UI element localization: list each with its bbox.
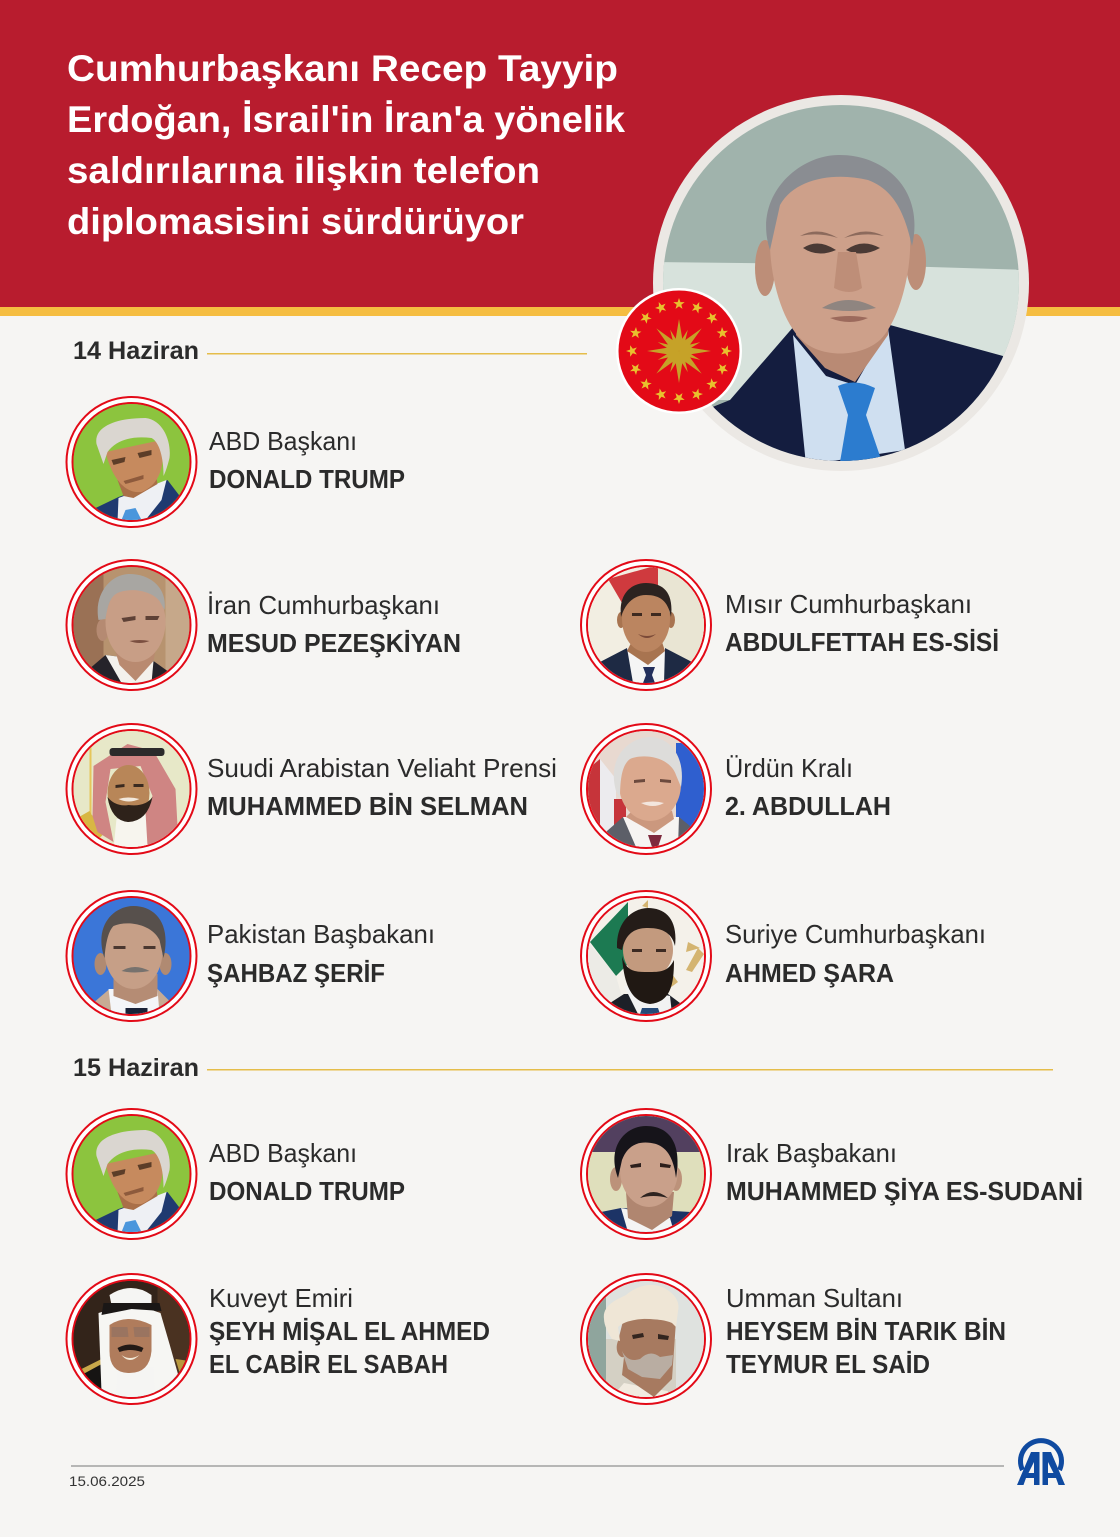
name: DONALD TRUMP: [209, 1176, 405, 1206]
entry: Muhammed Şiya es-Sudani: [581, 1109, 1083, 1239]
role: Suudi Arabistan Veliaht Prensi: [207, 753, 557, 783]
name: [726, 1316, 1006, 1379]
entry: Muhammed bin Selman: [66, 724, 557, 854]
portrait: Kral Abdullah: [581, 724, 711, 854]
section heading: 14 Haziran: 14 Haziran: [73, 337, 199, 365]
name: HEYSEM BİN TARIK BİN: [726, 1316, 1006, 1346]
portrait: Recep Tayyip Erdoğan: [650, 95, 1040, 471]
portrait: Şara: [581, 891, 711, 1021]
entry: Abdulfettah es-Sisi: [581, 560, 999, 690]
role: Umman Sultanı: [726, 1283, 903, 1313]
entry: Donald Trump (14 Haziran): [66, 397, 405, 527]
role: Ürdün Kralı: [725, 753, 853, 783]
name: [209, 1316, 490, 1379]
portrait: Sisi: [581, 560, 711, 690]
title: [67, 48, 625, 242]
title: Erdoğan, İsrail'in İran'a yönelik: [67, 99, 625, 140]
portrait: Şerif: [66, 891, 196, 1021]
name: ŞAHBAZ ŞERİF: [207, 958, 385, 988]
portrait: Pezeşkiyan: [66, 560, 196, 690]
role: Kuveyt Emiri: [209, 1283, 353, 1313]
entry: Donald Trump (15 Haziran): [66, 1109, 405, 1239]
name: DONALD TRUMP: [209, 464, 405, 494]
date: 15.06.2025: [69, 1473, 145, 1489]
portrait: Trump: [66, 397, 196, 527]
role: Suriye Cumhurbaşkanı: [725, 919, 986, 949]
portrait: Bin Selman: [66, 724, 196, 854]
name: MUHAMMED ŞİYA ES-SUDANİ: [726, 1176, 1083, 1206]
name: 2. ABDULLAH: [725, 791, 891, 821]
role: Mısır Cumhurbaşkanı: [725, 589, 972, 619]
footer rule: [71, 1466, 1004, 1467]
entry: Heysem bin Tarık: [581, 1274, 1006, 1404]
entry: Şahbaz Şerif: [66, 891, 435, 1021]
portrait: Trump: [66, 1109, 196, 1239]
name: MESUD PEZEŞKİYAN: [207, 628, 461, 658]
entry: Ahmed Şara: [581, 891, 986, 1021]
name: ABDULFETTAH ES-SİSİ: [725, 627, 999, 657]
title: Cumhurbaşkanı Recep Tayyip: [67, 48, 618, 89]
name: TEYMUR EL SAİD: [726, 1349, 930, 1379]
portrait: Sudani: [581, 1109, 711, 1239]
title: diplomasisini sürdürüyor: [67, 201, 524, 242]
entry: 2. Abdullah: [581, 724, 891, 854]
portrait: Kuveyt Emiri: [66, 1274, 196, 1404]
role: Irak Başbakanı: [726, 1138, 897, 1168]
name: AHMED ŞARA: [725, 958, 894, 988]
header band: [0, 0, 1120, 316]
role: ABD Başkanı: [209, 426, 357, 456]
portrait: Umman Sultanı: [581, 1274, 711, 1404]
title: saldırılarına ilişkin telefon: [67, 150, 540, 191]
entry: Şeyh Mişal: [66, 1274, 490, 1404]
emblem: Presidential seal: [616, 288, 742, 414]
entry: Mesud Pezeşkiyan: [66, 560, 461, 690]
name: ŞEYH MİŞAL EL AHMED: [209, 1316, 490, 1346]
name: EL CABİR EL SABAH: [209, 1349, 448, 1379]
role: ABD Başkanı: [209, 1138, 357, 1168]
logo: Anadolu Ajansı: [1017, 1441, 1065, 1485]
role: İran Cumhurbaşkanı: [207, 590, 440, 620]
section heading: 15 Haziran: 15 Haziran: [73, 1054, 199, 1082]
role: Pakistan Başbakanı: [207, 919, 435, 949]
name: MUHAMMED BİN SELMAN: [207, 791, 528, 821]
